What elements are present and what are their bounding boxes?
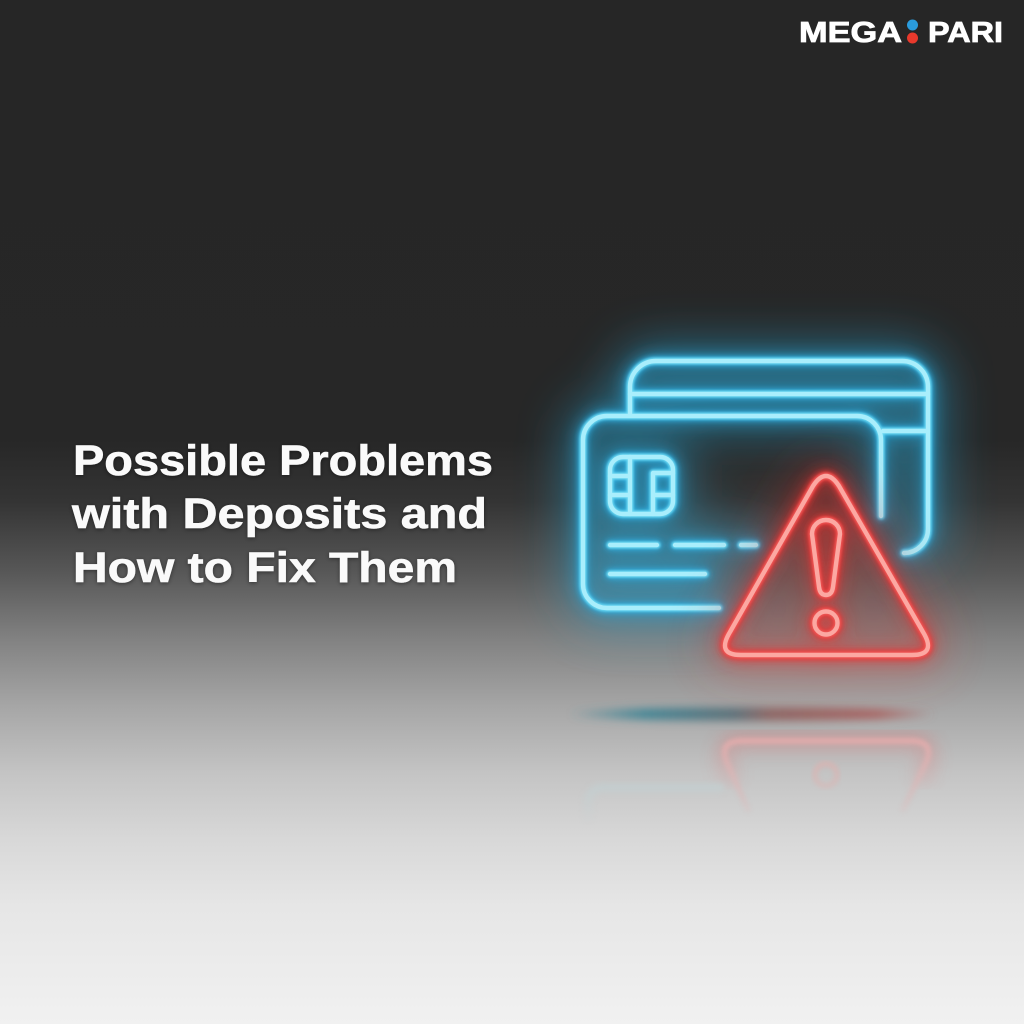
logo: MEGA PARI: PARI xyxy=(928,17,1003,49)
title xyxy=(71,437,493,592)
icon: neon credit cards xyxy=(583,361,928,608)
title: Possible Problems xyxy=(73,437,493,485)
logo: MEGA PARI xyxy=(799,17,1003,49)
floor shadow xyxy=(572,708,932,720)
icon: neon warning triangle xyxy=(725,476,928,655)
title: How to Fix Them xyxy=(73,544,457,592)
logo: MEGA PARI: MEGA xyxy=(799,17,902,49)
title: with Deposits and xyxy=(71,490,487,538)
reflection of icon on floor xyxy=(714,730,939,794)
